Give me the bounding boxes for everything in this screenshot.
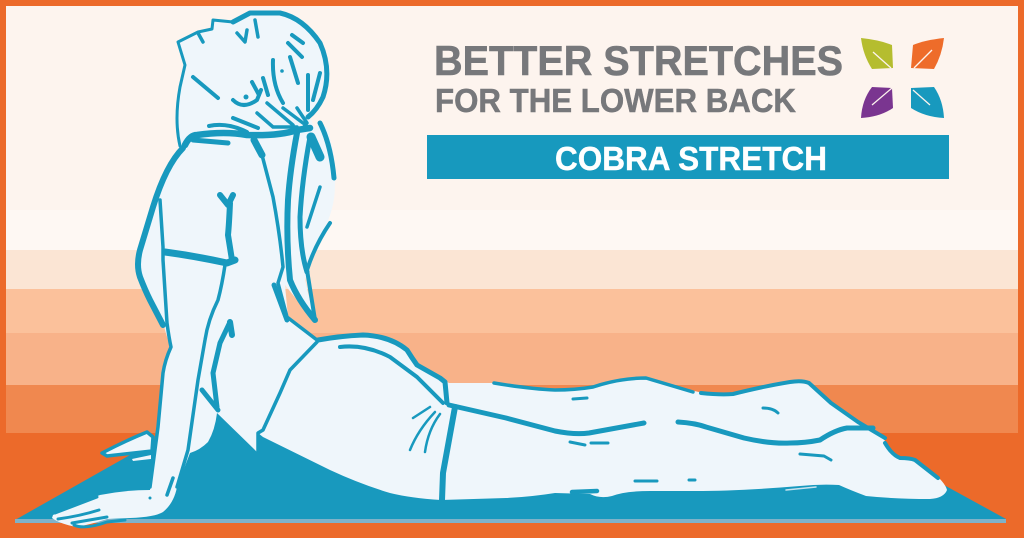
logo: four leaves (861, 38, 944, 118)
heading: better stretches: BETTER STRETCHES (434, 37, 843, 84)
hip and shorts (258, 335, 455, 500)
ponytail (287, 123, 334, 320)
head and hair outline (177, 13, 327, 146)
banner: cobra stretch (427, 135, 949, 179)
back hand (102, 432, 153, 461)
face features (198, 20, 258, 42)
icon: purple leaf (861, 87, 893, 118)
front hand details (55, 478, 173, 527)
collar (209, 118, 258, 132)
leg lines (449, 378, 938, 492)
icon: green leaf (861, 38, 893, 69)
subheading: for the lower back: FOR THE LOWER BACK (435, 82, 796, 119)
icon: blue leaf (911, 87, 944, 118)
torso and arm lines (138, 140, 317, 487)
ear and hair strands (233, 35, 320, 110)
icon: orange leaf (911, 38, 944, 69)
banner: cobra stretch: COBRA STRETCH (555, 140, 827, 177)
yoga mat (15, 400, 1006, 523)
